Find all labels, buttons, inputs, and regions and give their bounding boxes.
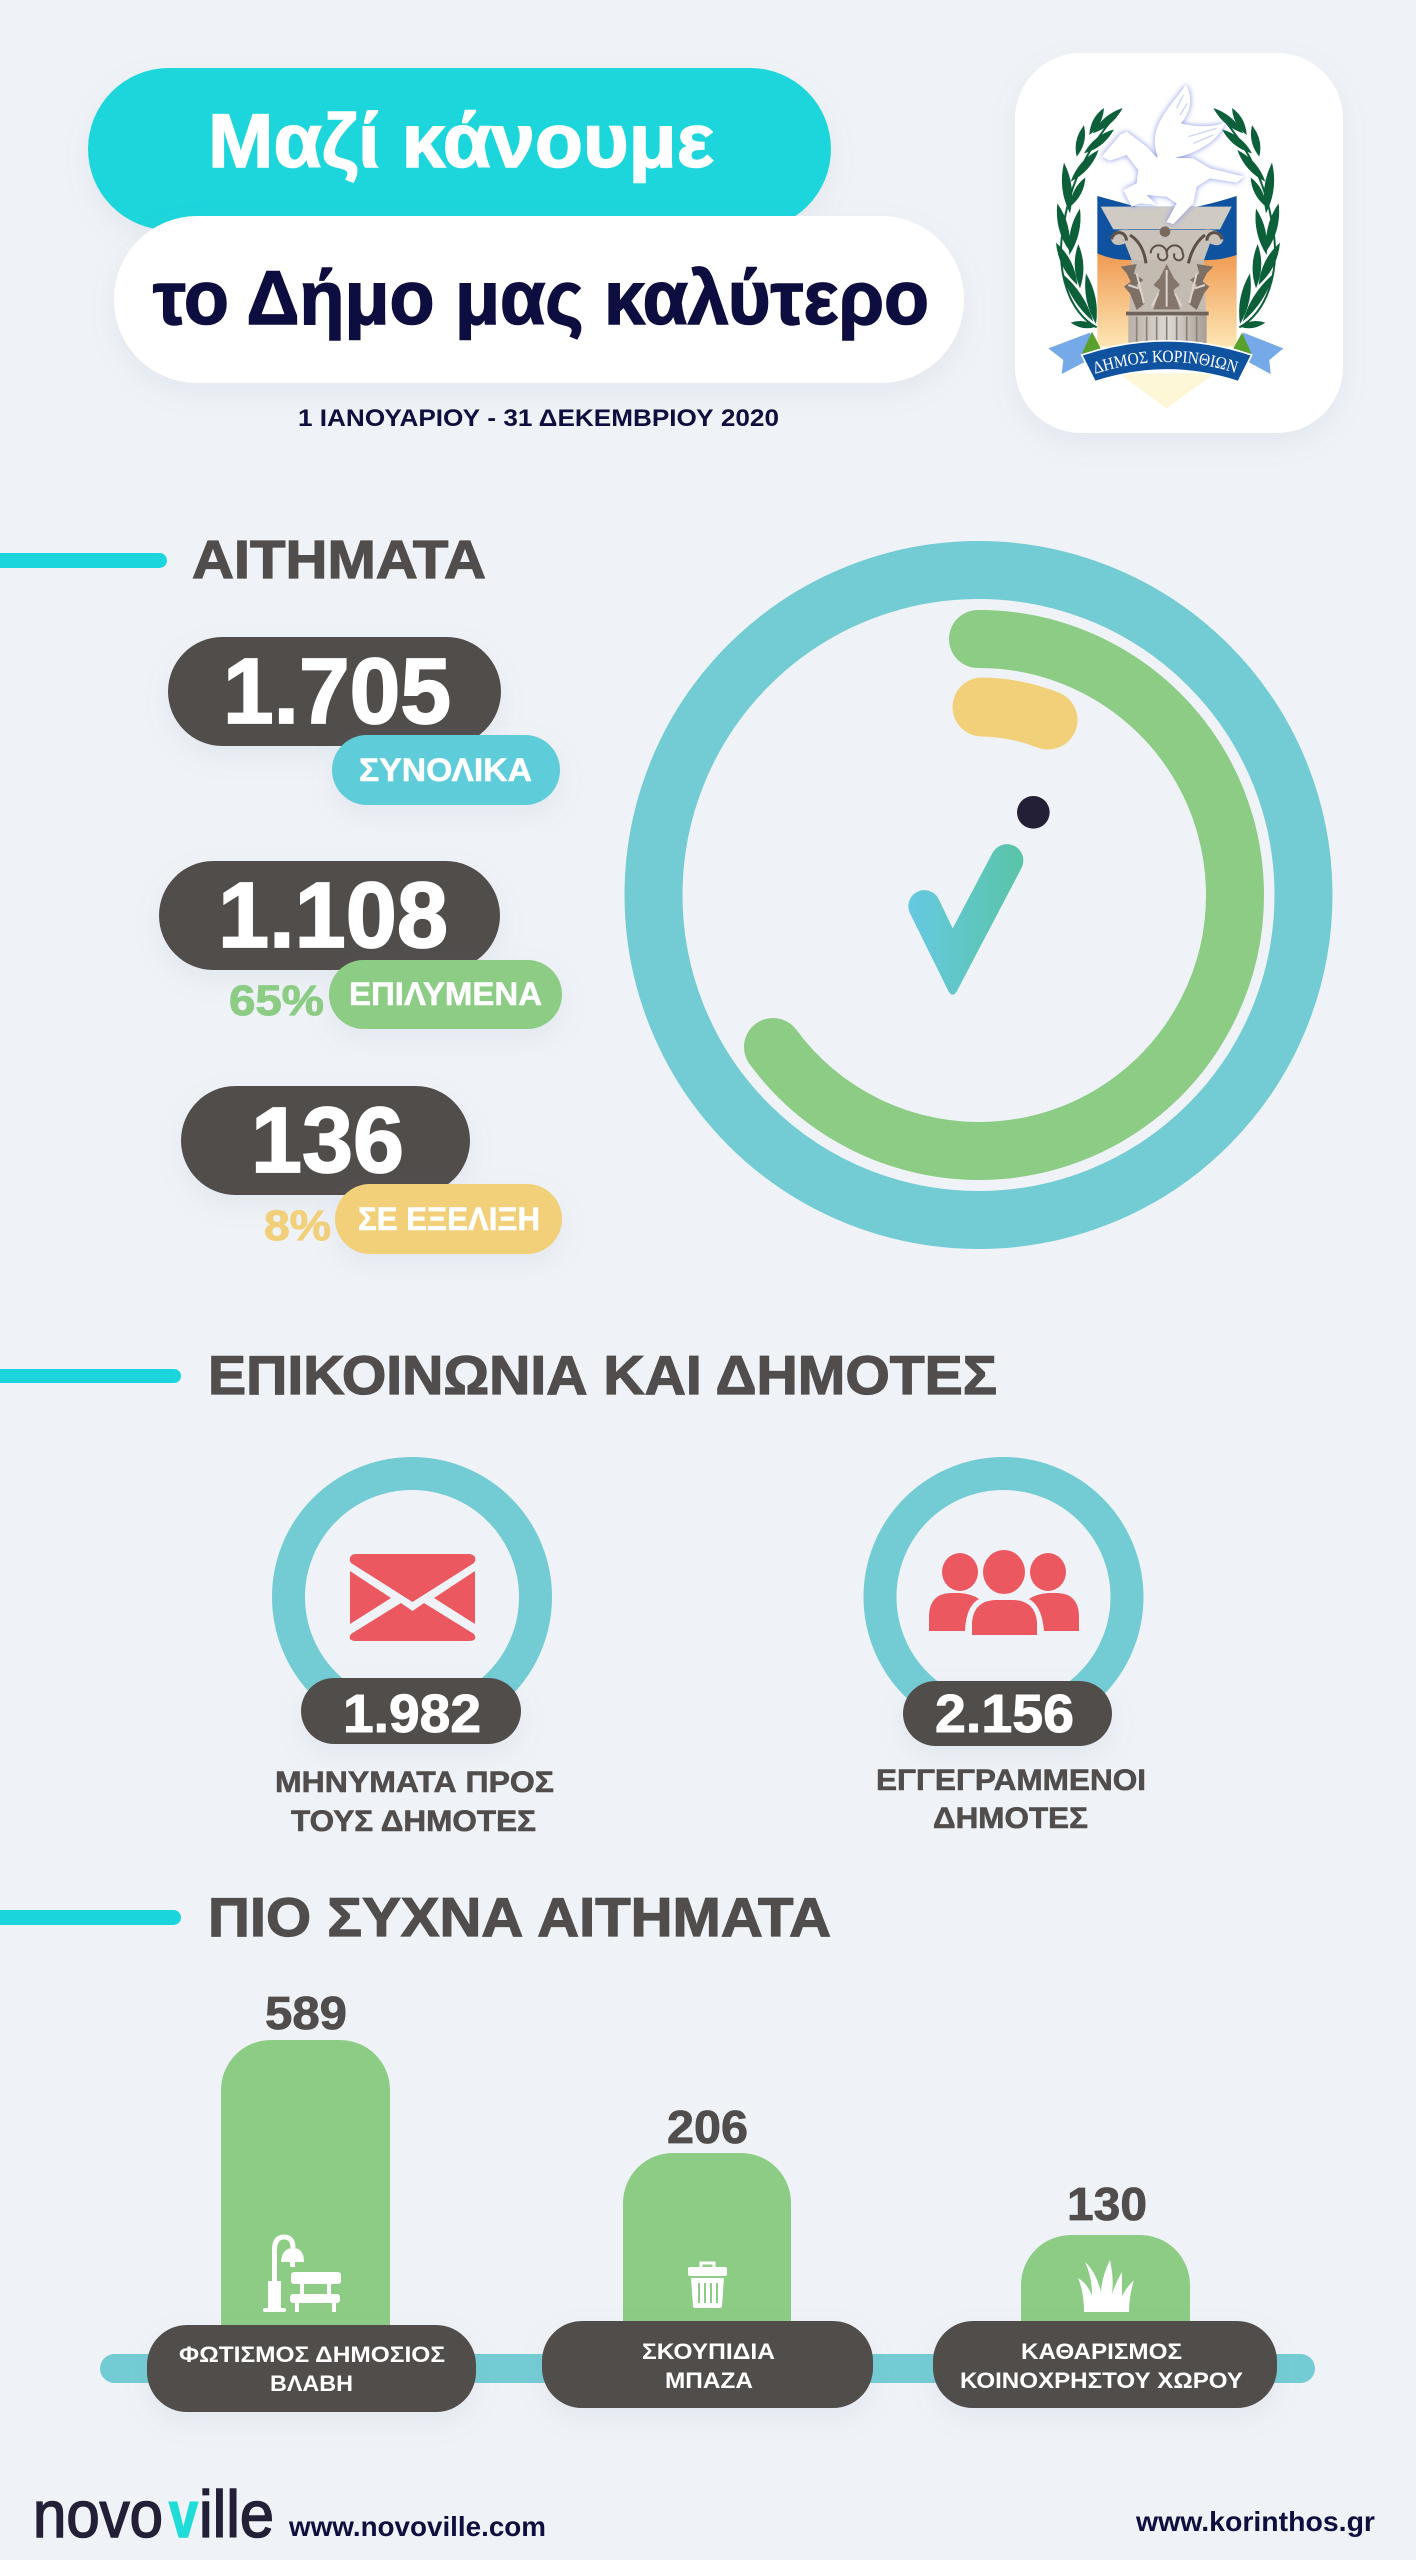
ribbon <box>1048 332 1284 381</box>
section heading: requests <box>0 530 486 590</box>
label: total <box>332 735 560 805</box>
category pill: cleaning: ΚΟΙΝΟΧΡΗΣΤΟΥ ΧΩΡΟΥ <box>960 2368 1243 2393</box>
category pill: lighting: ΒΛΑΒΗ <box>270 2371 353 2396</box>
footer: novoville logo: v <box>169 2477 198 2551</box>
stat: total requests: 1.705 <box>223 639 451 743</box>
title pill: white: το Δήμο μας καλύτερο <box>153 256 929 341</box>
stat: messages <box>275 1474 554 1838</box>
bar: lighting <box>147 1987 476 2412</box>
label: in progress: ΣΕ ΕΞΕΛΙΞΗ <box>358 1201 540 1237</box>
value pill: messages <box>301 1678 521 1744</box>
footer: novoville logo <box>33 2477 274 2551</box>
footer: municipality url: www.korinthos.gr <box>1135 2506 1375 2537</box>
bar: garbage: 206 <box>667 2101 748 2153</box>
ribbon: ΔΗΜΟΣ ΚΟΡΙΝΘΙΩΝ <box>1095 350 1239 374</box>
radial progress chart <box>654 570 1304 1220</box>
title pill: teal <box>88 68 831 230</box>
ring: citizens <box>880 1474 1127 1720</box>
footer: novoville url: www.novoville.com <box>288 2511 546 2542</box>
shield <box>1097 196 1237 408</box>
title pill: teal: Μαζί κάνουμε <box>208 99 714 184</box>
stat: resolved requests <box>159 861 562 1029</box>
stat: in progress requests: 136 <box>251 1088 404 1192</box>
bar: lighting: 589 <box>265 1987 347 2039</box>
bar: cleaning: 130 <box>1067 2178 1147 2230</box>
title pill: white <box>114 216 964 383</box>
municipality emblem <box>1048 83 1284 408</box>
section heading: communication: ΕΠΙΚΟΙΝΩΝΙΑ ΚΑΙ ΔΗΜΟΤΕΣ <box>208 1344 997 1406</box>
category pill: garbage <box>542 2321 873 2408</box>
category pill: cleaning <box>933 2321 1277 2408</box>
bar: cleaning <box>933 2178 1277 2408</box>
stat: total requests <box>168 637 560 805</box>
label: citizens: ΔΗΜΟΤΕΣ <box>933 1802 1088 1835</box>
label: total: ΣΥΝΟΛΙΚΑ <box>359 752 532 788</box>
label: messages <box>275 1766 554 1838</box>
label: resolved <box>329 960 562 1029</box>
icon: street lamp and bench <box>263 2237 341 2312</box>
label: messages: ΜΗΝΥΜΑΤΑ ΠΡΟΣ <box>275 1766 554 1799</box>
value pill: citizens <box>903 1681 1112 1746</box>
label: citizens: ΕΓΓΕΓΡΑΜΜΕΝΟΙ <box>876 1764 1146 1797</box>
stat: in progress requests <box>181 1086 562 1254</box>
arc: resolved 65% <box>773 639 1235 1151</box>
resolved percentage: 65% <box>229 977 324 1025</box>
icon: people <box>929 1550 1079 1635</box>
ring: total <box>654 570 1304 1220</box>
stat: resolved requests: 1.108 <box>218 863 448 967</box>
chart baseline track <box>100 2354 1315 2383</box>
icon: grass <box>1078 2260 1134 2312</box>
section heading: most frequent requests: ΠΙΟ ΣΥΧΝΑ ΑΙΤΗΜΑΤΑ <box>208 1886 831 1948</box>
category pill: lighting: ΦΩΤΙΣΜΟΣ ΔΗΜΟΣΙΟΣ <box>179 2342 445 2367</box>
stat: registered citizens <box>876 1474 1146 1835</box>
category pill: garbage: ΣΚΟΥΠΙΔΙΑ <box>642 2339 775 2364</box>
icon: envelope <box>350 1554 475 1641</box>
section heading: requests: ΑΙΤΗΜΑΤΑ <box>192 530 486 590</box>
laurel right <box>1213 108 1280 328</box>
title <box>88 68 964 383</box>
value pill: messages: 1.982 <box>343 1684 481 1744</box>
icon: trash can <box>688 2263 727 2308</box>
footer: novoville logo: novo <box>33 2477 163 2551</box>
corinthian column <box>1101 207 1232 343</box>
laurel left <box>1056 108 1123 328</box>
ring: messages <box>288 1474 536 1720</box>
label: citizens <box>876 1764 1146 1835</box>
category pill: lighting <box>147 2325 476 2412</box>
icon: check mark <box>908 796 1050 995</box>
category pill: cleaning: ΚΑΘΑΡΙΣΜΟΣ <box>1021 2339 1182 2364</box>
arc: in progress 8% <box>982 707 1048 720</box>
label: messages: ΤΟΥΣ ΔΗΜΟΤΕΣ <box>291 1805 536 1838</box>
pegasus <box>1102 85 1244 224</box>
category pill: garbage: ΜΠΑΖΑ <box>665 2368 753 2393</box>
label: in progress <box>335 1184 562 1254</box>
in progress percentage: 8% <box>264 1202 331 1250</box>
logo card <box>1015 53 1343 438</box>
value pill: citizens: 2.156 <box>935 1684 1074 1744</box>
label: resolved: ΕΠΙΛΥΜΕΝΑ <box>349 976 542 1012</box>
bar: garbage <box>542 2101 873 2408</box>
bar chart: most frequent requests <box>100 1987 1315 2412</box>
date range: 1 ΙΑΝΟΥΑΡΙΟΥ - 31 ΔΕΚΕΜΒΡΙΟΥ 2020 <box>298 405 779 432</box>
footer: novoville logo: ille <box>199 2477 274 2551</box>
